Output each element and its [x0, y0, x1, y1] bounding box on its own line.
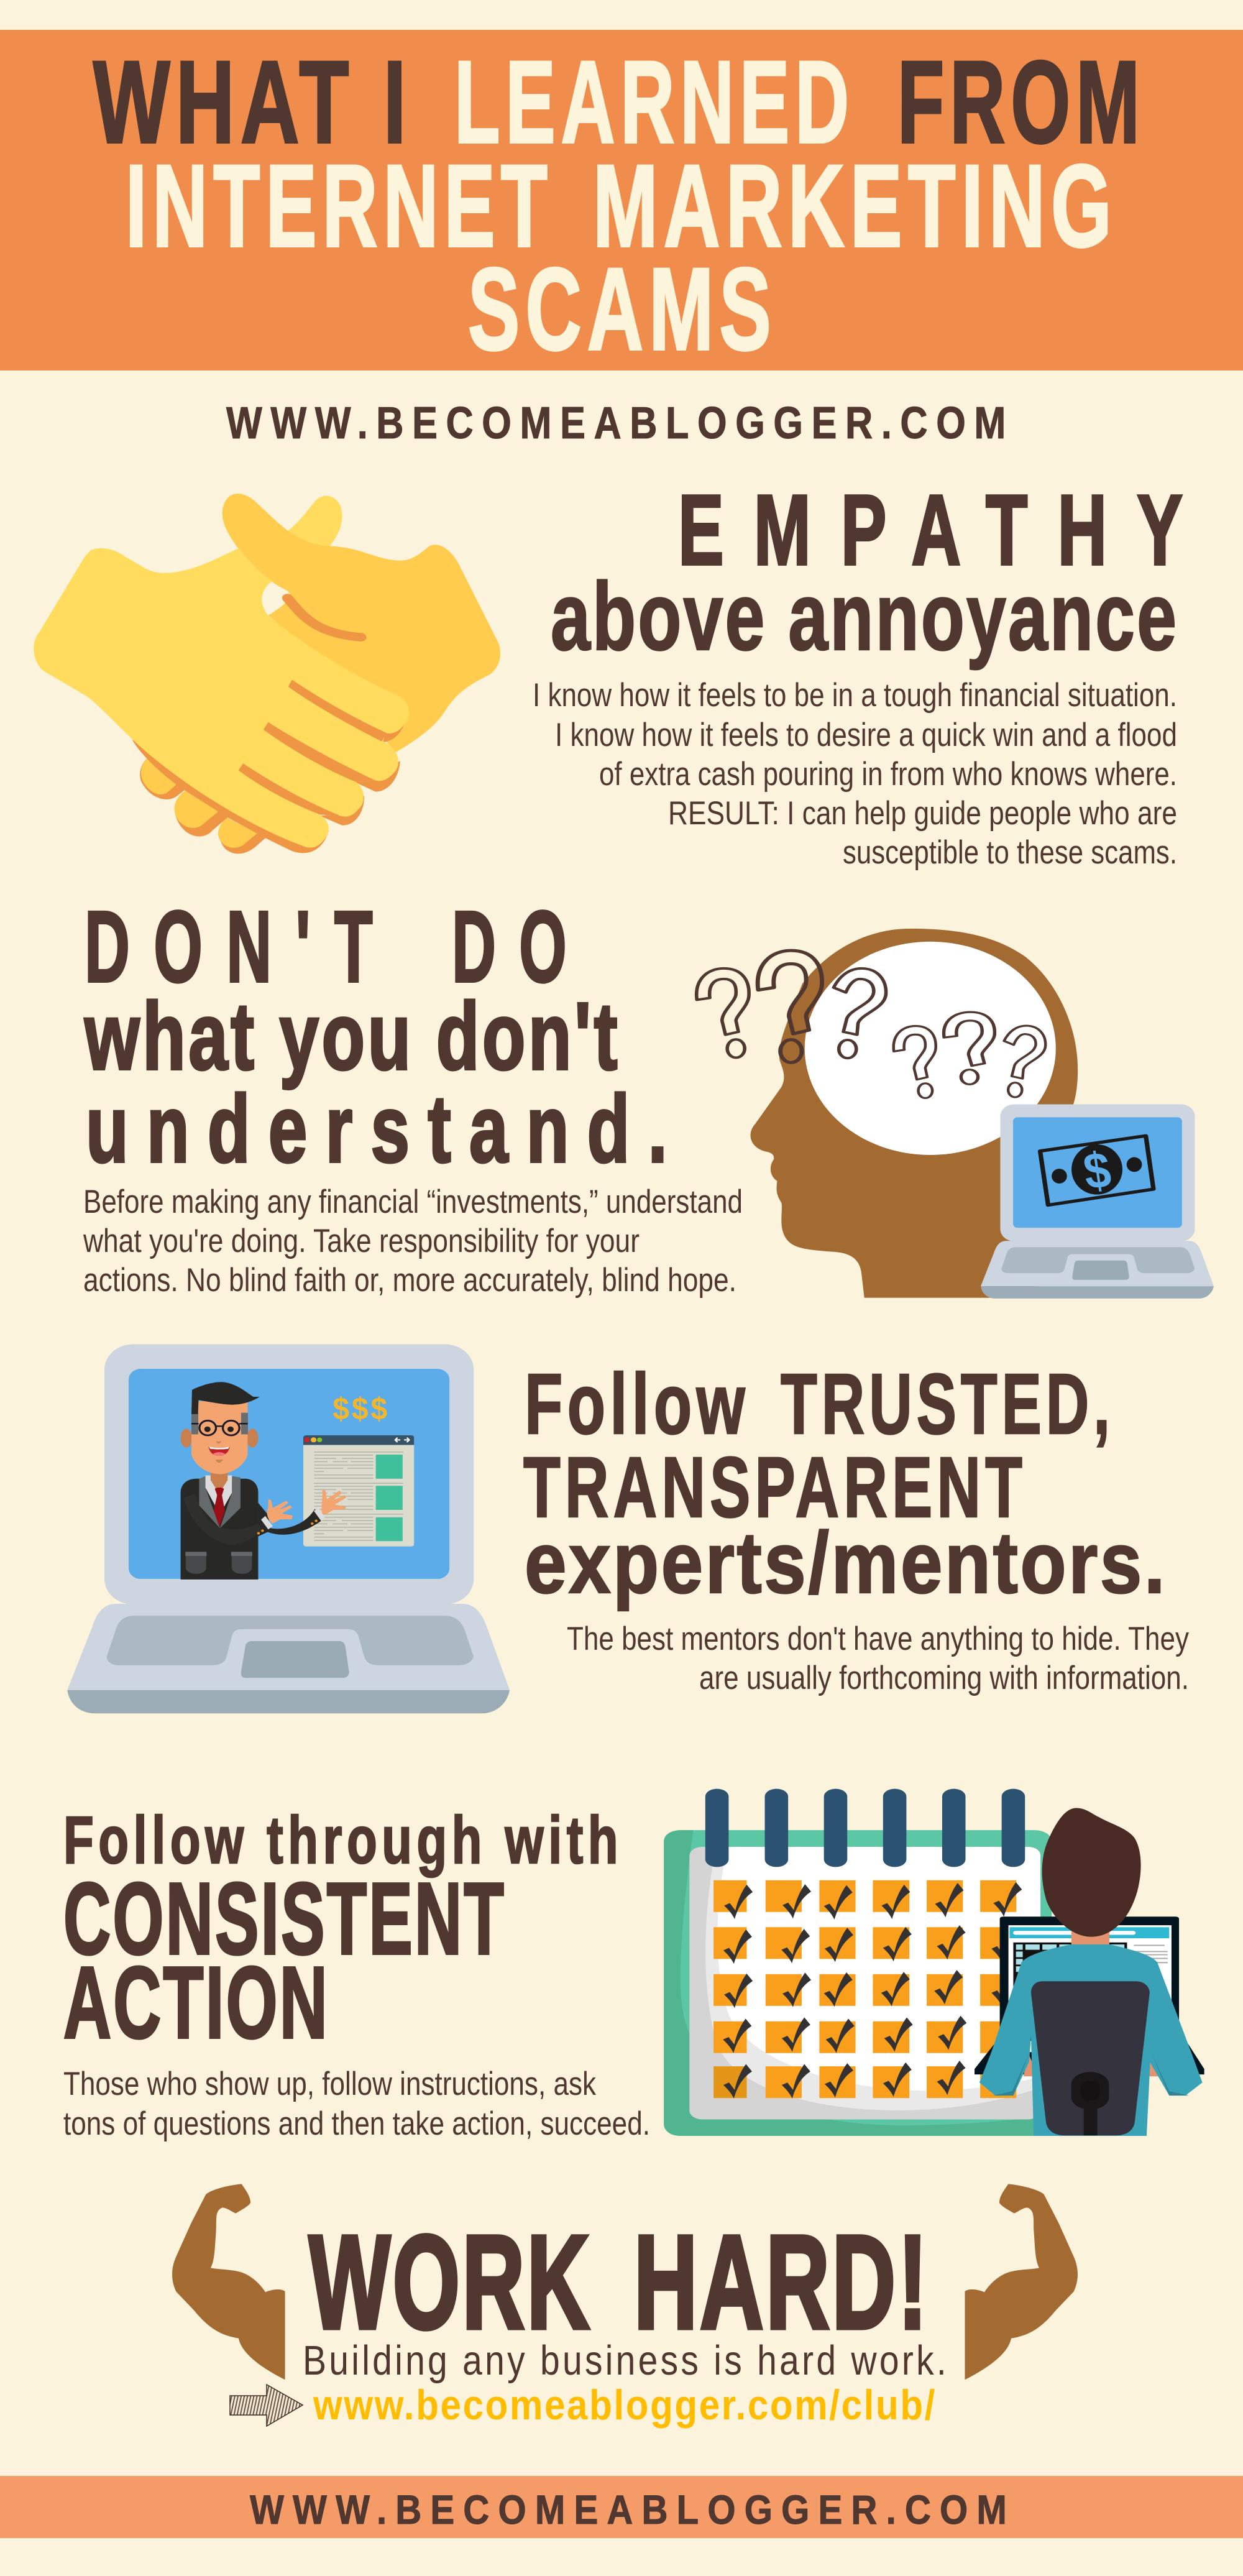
- icon: banknote: $: [1080, 1142, 1114, 1200]
- heading: follow trusted: Follow: [525, 1356, 750, 1452]
- icon: question mark 4: [894, 1026, 936, 1098]
- title text: [93, 37, 1145, 374]
- heading: follow trusted: [525, 1356, 1114, 1452]
- icon: handshake: [34, 494, 500, 853]
- arrow: [230, 2385, 303, 2426]
- heading: consistent: CONSISTENT: [63, 1862, 506, 1976]
- laptop seen from behind person: [975, 1916, 1204, 2074]
- body text: mentors: [567, 1621, 1189, 1696]
- website url top: WWW.BECOMEABLOGGER.COM: [226, 398, 1014, 448]
- subheading: what you don't: what you don't: [84, 983, 620, 1090]
- icon: question mark 3: [833, 968, 886, 1058]
- icon: banknote: [1040, 1136, 1154, 1205]
- title text: LEARNED: [454, 37, 855, 167]
- title text: INTERNET: [126, 140, 553, 271]
- body text: don't do: what you're doing. Take responsibility for your: [83, 1223, 640, 1259]
- icon: flexed arm right: [965, 2184, 1078, 2380]
- icon: web page document: [303, 1435, 414, 1547]
- icon: laptop with presenter: [67, 1344, 510, 1713]
- icon: small laptop: [981, 1104, 1214, 1299]
- heading: work hard: WORK: [309, 2208, 592, 2357]
- dollar signs: $$$: [333, 1392, 390, 1427]
- body text: don't do: Before making any financial “investments,” understand: [83, 1184, 743, 1220]
- body text: don't do: [83, 1184, 743, 1299]
- title text: SCAMS: [468, 244, 777, 374]
- heading: action: ACTION: [63, 1946, 329, 2059]
- heading: transparent: TRANSPARENT: [523, 1440, 1027, 1535]
- body text: action: Those who show up, follow instructions, ask: [63, 2066, 596, 2102]
- heading: work hard: HARD!: [634, 2208, 930, 2357]
- body text: empathy: susceptible to these scams.: [843, 834, 1177, 871]
- body text: don't do: actions. No blind faith or, more accurately, blind hope.: [83, 1262, 736, 1299]
- person: [979, 1808, 1203, 2136]
- panel: work hard: [172, 2184, 1078, 2429]
- heading: don't do: DON'T: [85, 890, 397, 1003]
- icon: question mark 6: [1004, 1026, 1045, 1097]
- panel: don't do: [83, 890, 1214, 1299]
- icon: question mark 1: [697, 968, 749, 1057]
- panel: empathy: [34, 474, 1213, 871]
- panel: trusted experts: [67, 1344, 1189, 1713]
- title text: WHAT I: [93, 37, 412, 167]
- body text: action: [63, 2066, 650, 2142]
- icon: flexed arm left: [172, 2184, 285, 2380]
- title banner: [0, 30, 1243, 374]
- icon: question mark 2: [758, 950, 822, 1062]
- calendar: [664, 1789, 1052, 2136]
- club link: www.becomeablogger.com/club/: [313, 2381, 937, 2429]
- heading: follow through: Follow through with: [63, 1802, 623, 1877]
- website url footer: WWW.BECOMEABLOGGER.COM: [250, 2486, 1016, 2532]
- panel: consistent action: [63, 1789, 1204, 2142]
- body text: action: tons of questions and then take action, succeed.: [63, 2105, 650, 2142]
- footer band: [0, 2476, 1243, 2538]
- heading: don't do: DO: [452, 890, 590, 1003]
- icon: question mark 5: [944, 1012, 994, 1084]
- icon: calendar with person at laptop: [664, 1789, 1204, 2136]
- icon: head with question marks: [697, 929, 1214, 1299]
- icon: businessman: [181, 1382, 346, 1580]
- subheading: building: Building any business is hard work.: [303, 2337, 949, 2384]
- subheading: understand: understand.: [86, 1075, 686, 1182]
- body text: empathy: [533, 677, 1177, 871]
